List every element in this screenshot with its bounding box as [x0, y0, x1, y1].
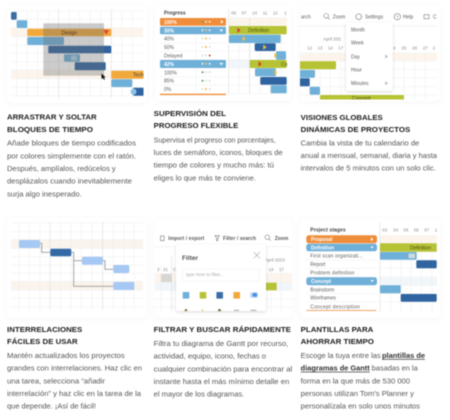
date headers: 11 [263, 10, 268, 15]
toolbar: ? [396, 14, 399, 20]
body text: anual a mensual, semanal, diaria y hasta [301, 153, 437, 160]
bar label: Design: Design [62, 30, 77, 36]
icon: mouse cursor [102, 74, 106, 80]
card background [154, 218, 292, 318]
body text: tiempo de colores y mucho más: tú [154, 163, 274, 170]
gantt bars: Definition [410, 246, 431, 252]
body text: basadas en la [372, 366, 418, 373]
progress rows: 100% [164, 20, 177, 26]
heading: AHORRAR TIEMPO [301, 337, 374, 346]
toolbar: Zoom [333, 15, 345, 21]
heading: INTERRELACIONES [7, 325, 82, 334]
calendar dates: 26 [412, 45, 418, 50]
heading: BLOQUES DE TIEMPO [7, 125, 93, 134]
task list: Concept [311, 279, 331, 285]
heading [7, 113, 97, 134]
date headers: 06 [231, 10, 237, 15]
background gantt [155, 256, 292, 312]
placeholder text: type here to filter... [186, 272, 224, 277]
calendar dates: 12 [307, 45, 313, 50]
gantt bars [229, 26, 288, 93]
text block: templates [301, 325, 425, 411]
heading: PLANTILLAS PARA [301, 325, 374, 334]
date headers: 05 [404, 228, 409, 233]
text block: dependencies [7, 325, 142, 411]
body text: grandes con interrelaciones. Haz clic en [7, 366, 142, 373]
body text: Escoge la tuya entre las [301, 353, 381, 360]
settings dropdown menu [346, 23, 393, 91]
background gantt: 17 [279, 267, 284, 272]
card background [300, 218, 440, 318]
card background [155, 5, 291, 101]
toolbar: Help [403, 15, 414, 21]
progress rows: 50% [164, 45, 175, 51]
panel: dependencies screenshot [7, 218, 147, 318]
settings dropdown menu: Month [351, 27, 365, 33]
task list: Problem definition [310, 271, 355, 277]
heading: DINÁMICAS DE PROYECTOS [301, 125, 410, 134]
date headers: 07 [242, 10, 247, 15]
panel: progress tracking screenshot [155, 5, 291, 101]
body text: interrelación” y haz clic en la tarea de la [7, 391, 141, 398]
body text: una tarea, selecciona “añadir [7, 378, 106, 385]
body text: personas utilizan Tom's Planner y [301, 391, 415, 398]
task list: Brainstorm [310, 287, 334, 293]
text block: drag and drop [7, 113, 137, 198]
colour swatches [183, 292, 258, 299]
dependency connectors [40, 243, 113, 286]
card background [7, 218, 147, 318]
body text: personalízala en solo unos minutos [301, 404, 421, 411]
progress rows: 0% [164, 87, 172, 93]
progress rows: Delayed [164, 53, 183, 59]
body text: Añade bloques de tiempo codificados [7, 141, 137, 148]
body text: plantillas de [382, 353, 425, 360]
text block: flexible progress [154, 109, 283, 182]
icon row [184, 308, 256, 311]
calendar dates: 4 [393, 45, 396, 50]
table heading: Project stages [310, 228, 346, 234]
heading [301, 113, 410, 134]
background gantt: 3 [157, 267, 160, 272]
background gantt: April 2023 [265, 258, 285, 263]
date headers: 07 [424, 228, 430, 233]
body text: instante hasta el más mínimo detalle en [154, 379, 289, 386]
task bars [19, 240, 134, 290]
body text: Mantén actualizados los proyectos [7, 353, 125, 360]
body text: que depende. ¡Así de fácil! [7, 404, 96, 411]
date headers: 1 [284, 10, 287, 15]
body text [301, 353, 425, 411]
panel: drag and drop screenshot [10, 9, 144, 98]
body text: el mayor de los diagramas. [154, 392, 244, 399]
text block: dynamic views [301, 113, 437, 173]
calendar dates: 13 [318, 45, 323, 50]
date headers: 03 [382, 228, 388, 233]
progress rows: 85% [164, 79, 175, 85]
body text: cualquier combinación para encontrar al [154, 366, 293, 373]
body text: diagramas de Gantt [301, 366, 370, 373]
body text: surja algo inesperado. [7, 191, 82, 198]
panel: dynamic views screenshot [299, 12, 437, 100]
body text: luces de semáforo, iconos, bloques de [154, 150, 283, 157]
body text: Filtra tu diagrama de Gantt por recurso, [154, 341, 288, 348]
task list: Report [310, 262, 326, 268]
panel: templates screenshot [300, 218, 440, 318]
toolbar [155, 235, 292, 247]
dialog title: Filter [182, 255, 199, 262]
text block: filter and search [154, 325, 293, 399]
task list: Proposal [311, 237, 333, 243]
body text [154, 137, 283, 182]
traffic light dots [202, 21, 211, 90]
panel: filter screenshot [155, 234, 292, 314]
body text: Después, amplíalos, redúcelos y [7, 166, 116, 173]
table heading: Progress [164, 11, 186, 17]
body text: Supervisa el progreso con porcentajes, [154, 137, 276, 144]
date headers: 04 [393, 228, 399, 233]
body text [154, 341, 293, 399]
icon: red flag marker [104, 30, 109, 35]
gantt rows and bars [296, 53, 437, 103]
gantt bars: Co [281, 62, 288, 68]
toolbar: arch [301, 15, 311, 21]
body text [301, 140, 437, 173]
body text: forma en la que más de 530 000 [301, 378, 410, 385]
toolbar: Zoom [275, 236, 289, 242]
body text: desplázalos cuando inevitablemente [7, 179, 132, 186]
highlighted rows [11, 28, 143, 79]
heading: FILTRAR Y BUSCAR RÁPIDAMENTE [154, 325, 291, 334]
heading: VISIONES GLOBALES [301, 113, 383, 122]
toolbar: C [433, 15, 437, 21]
toolbar: Import / export [168, 236, 205, 242]
body text: intervalos de 5 minutos con un solo clic. [301, 166, 436, 173]
selection rectangle [43, 23, 104, 76]
gantt rows and bars: Concept [352, 96, 371, 102]
body text [7, 141, 137, 198]
calendar dates: 27 [423, 45, 428, 50]
heading [154, 109, 238, 130]
progress rows: 100% [164, 70, 177, 76]
background gantt: 31 [163, 267, 168, 272]
task list: Definition [311, 245, 334, 251]
heading [301, 325, 374, 346]
date headers: 06 [414, 228, 419, 233]
calendar dates: 17 [338, 45, 344, 50]
heading: SUPERVISIÓN DEL [154, 109, 226, 118]
task list [306, 235, 377, 311]
highlighted rows [11, 239, 143, 290]
calendar dates: 2 [433, 45, 436, 50]
date headers: 1 [435, 228, 438, 233]
settings dropdown menu: Week [351, 41, 364, 47]
progress rows: 40% [164, 36, 175, 42]
icon: close [254, 252, 260, 258]
background gantt: 14 [268, 267, 274, 272]
body text: actividad, equipo, icono, fechas o [154, 354, 266, 361]
settings dropdown menu: Minutes [351, 81, 369, 87]
card background [7, 5, 147, 103]
date headers [382, 228, 438, 233]
date headers: 12 [273, 10, 278, 15]
task list: Wireframes [310, 296, 336, 302]
card background [300, 5, 440, 102]
toolbar [300, 14, 437, 26]
toolbar: Settings [365, 15, 384, 21]
calendar dates: 25 [402, 45, 407, 50]
heading: FÁCILES DE USAR [7, 337, 78, 346]
heading [7, 325, 82, 346]
body text: Cambia la vista de tu calendario de [301, 140, 419, 147]
background gantt: C [173, 267, 176, 272]
date headers [231, 10, 287, 15]
heading: PROGRESO FLEXIBLE [154, 121, 238, 130]
calendar dates [307, 37, 436, 50]
calendar dates: April 202: [323, 37, 342, 42]
progress rows: 30% [164, 28, 175, 34]
gantt bars: Definition [248, 28, 269, 34]
body text [7, 353, 142, 411]
progress rows [160, 18, 226, 95]
task list: First scan organizati... [310, 254, 363, 260]
toolbar: Filter / search [223, 236, 256, 242]
date headers: 10 [252, 10, 258, 15]
filter input [183, 269, 259, 281]
settings dropdown menu: Day [351, 54, 360, 60]
body text: eliges lo que más te conviene. [154, 175, 256, 182]
gantt bars: Tech [133, 72, 144, 78]
task list: Concept description [310, 304, 360, 310]
heading: ARRASTRAR Y SOLTAR [7, 113, 97, 122]
body text: por colores simplemente con el ratón. [7, 153, 136, 160]
calendar dates: 14 [328, 45, 333, 50]
settings dropdown menu: Hour [351, 68, 362, 74]
progress rows: 42% [164, 62, 175, 68]
filter dialog [176, 245, 266, 311]
